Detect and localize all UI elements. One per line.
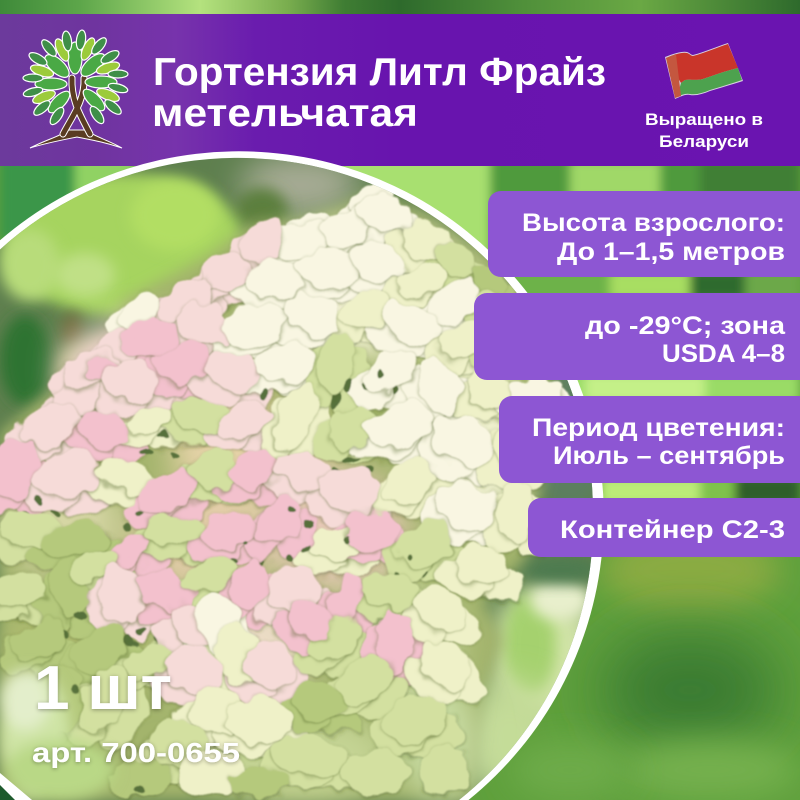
title xyxy=(152,51,606,135)
panel: height: До 1–1,5 метров xyxy=(557,238,785,266)
panel: container: Контейнер С2-3 xyxy=(560,516,785,544)
photo circle with white ring xyxy=(0,150,610,800)
icon: Belarus flag xyxy=(665,43,743,99)
title: Гортензия Литл Фрайз xyxy=(153,51,606,94)
hydrangea flower head xyxy=(0,190,572,800)
blurred foreground bloom, bottom left xyxy=(0,670,115,800)
text: grown in Belarus: Беларуси xyxy=(659,133,749,151)
ring corner at bottom left xyxy=(0,773,32,800)
top strip of background xyxy=(0,0,800,16)
panel: flowering period: Июль – сентябрь xyxy=(553,442,785,470)
photo backdrop xyxy=(0,150,610,800)
title: метельчатая xyxy=(152,92,418,135)
panel: hardiness: до -29°C; зона xyxy=(585,312,786,340)
text: grown in Belarus: Выращено в xyxy=(645,111,763,129)
panel: flowering period xyxy=(499,396,800,483)
article number: арт. 700-0655 xyxy=(32,737,240,768)
panel: container xyxy=(528,498,800,557)
panel: hardiness xyxy=(474,293,800,380)
tree trunk and roots xyxy=(30,78,122,148)
header band xyxy=(0,14,800,166)
text: grown in Belarus xyxy=(645,111,763,151)
panel: hardiness: USDA 4–8 xyxy=(662,340,785,368)
logo: tree xyxy=(22,29,129,148)
panel: flowering period: Период цветения: xyxy=(532,414,785,442)
panel: height xyxy=(488,191,800,277)
quantity label: 1 шт xyxy=(34,654,172,723)
tree leaves xyxy=(22,29,129,127)
panel: height: Высота взрослого: xyxy=(522,209,785,237)
